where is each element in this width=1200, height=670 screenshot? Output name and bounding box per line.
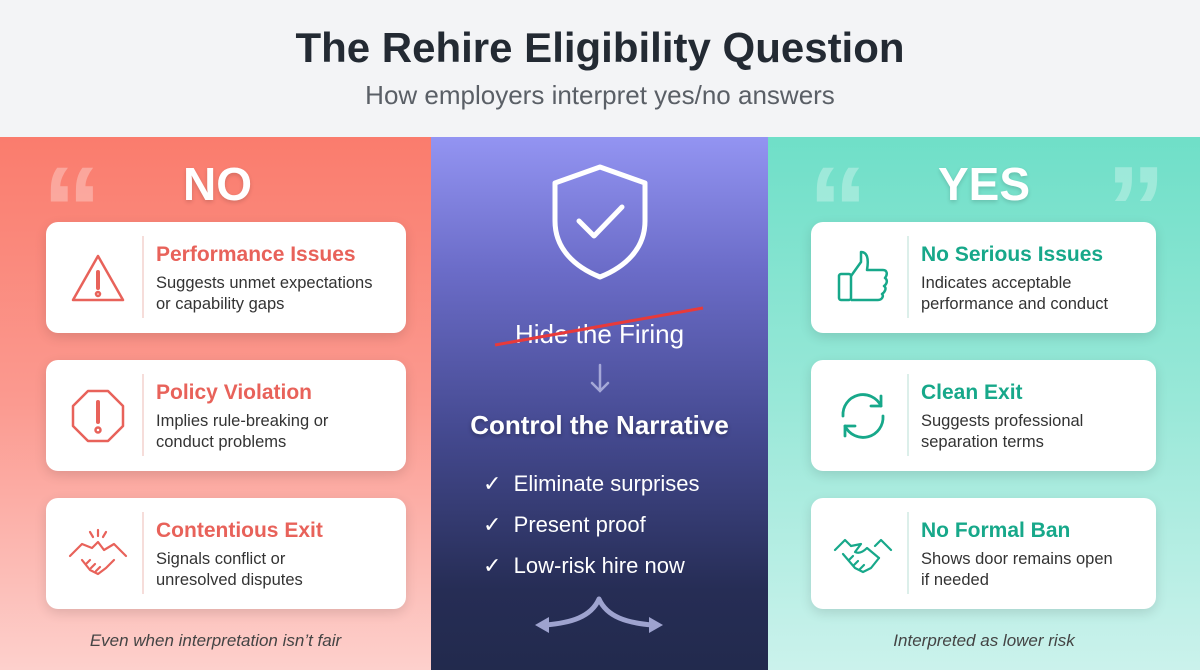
- panel: NO: [0, 137, 431, 670]
- card: contentious exit: unresolved disputes: [156, 571, 303, 589]
- card: no formal ban: if needed: [921, 571, 989, 589]
- checklist: ✓ Eliminate surprises: [483, 471, 700, 496]
- card: no formal ban: Shows door remains open: [921, 550, 1113, 568]
- card: clean exit: [811, 360, 1156, 471]
- checklist: [483, 471, 700, 578]
- heading: control the narrative: Control the Narrative: [470, 410, 729, 440]
- card: performance issues: or capability gaps: [156, 295, 284, 313]
- card: no serious issues: performance and conduct: [921, 295, 1108, 313]
- heading NO: NO: [183, 158, 252, 210]
- icon: thumbs up: [838, 250, 888, 302]
- title: The Rehire Eligibility Question: [295, 24, 905, 71]
- subtitle: How employers interpret yes/no answers: [365, 80, 835, 110]
- icon: refresh arrows: [842, 393, 884, 439]
- heading YES: YES: [938, 158, 1030, 210]
- struck text: hide the firing: Hide the Firing: [515, 319, 684, 349]
- card: performance issues: Performance Issues: [156, 243, 356, 266]
- card: no formal ban: No Formal Ban: [921, 519, 1070, 542]
- quote mark right: ”: [1106, 142, 1160, 276]
- card: policy violation: Policy Violation: [156, 381, 312, 404]
- card: contentious exit: [46, 498, 406, 609]
- quote mark left: “: [42, 142, 96, 276]
- card: no serious issues: Indicates acceptable: [921, 274, 1071, 292]
- card: clean exit: Suggests professional: [921, 412, 1083, 430]
- arrow: down: [590, 364, 610, 393]
- arrow: split left/right: [535, 596, 663, 633]
- card: contentious exit: Contentious Exit: [156, 519, 323, 542]
- card: policy violation: conduct problems: [156, 433, 286, 451]
- icon: broken handshake: [68, 528, 128, 576]
- card: no formal ban: [811, 498, 1156, 609]
- icon: warning triangle: [72, 254, 124, 302]
- card: contentious exit: Signals conflict or: [156, 550, 285, 568]
- quote mark left: “: [808, 142, 862, 276]
- checklist: ✓ Present proof: [483, 512, 646, 537]
- panel: YES: [768, 137, 1200, 670]
- struck text: hide the firing: [494, 306, 704, 349]
- card: performance issues: [46, 222, 406, 333]
- card: policy violation: Implies rule-breaking or: [156, 412, 328, 430]
- checklist: ✓ Low-risk hire now: [483, 553, 685, 578]
- icon: shield check: [552, 164, 648, 280]
- panel: center: [431, 137, 768, 670]
- card: no serious issues: [811, 222, 1156, 333]
- card: clean exit: Clean Exit: [921, 381, 1023, 404]
- card: no serious issues: No Serious Issues: [921, 243, 1103, 266]
- footer note: Even when interpretation isn’t fair: [90, 631, 341, 650]
- card: clean exit: separation terms: [921, 433, 1044, 451]
- icon: handshake: [834, 538, 892, 574]
- icon: octagon alert: [72, 390, 124, 442]
- card: policy violation: [46, 360, 406, 471]
- card: performance issues: Suggests unmet expectations: [156, 274, 372, 292]
- footer note: Interpreted as lower risk: [893, 631, 1075, 650]
